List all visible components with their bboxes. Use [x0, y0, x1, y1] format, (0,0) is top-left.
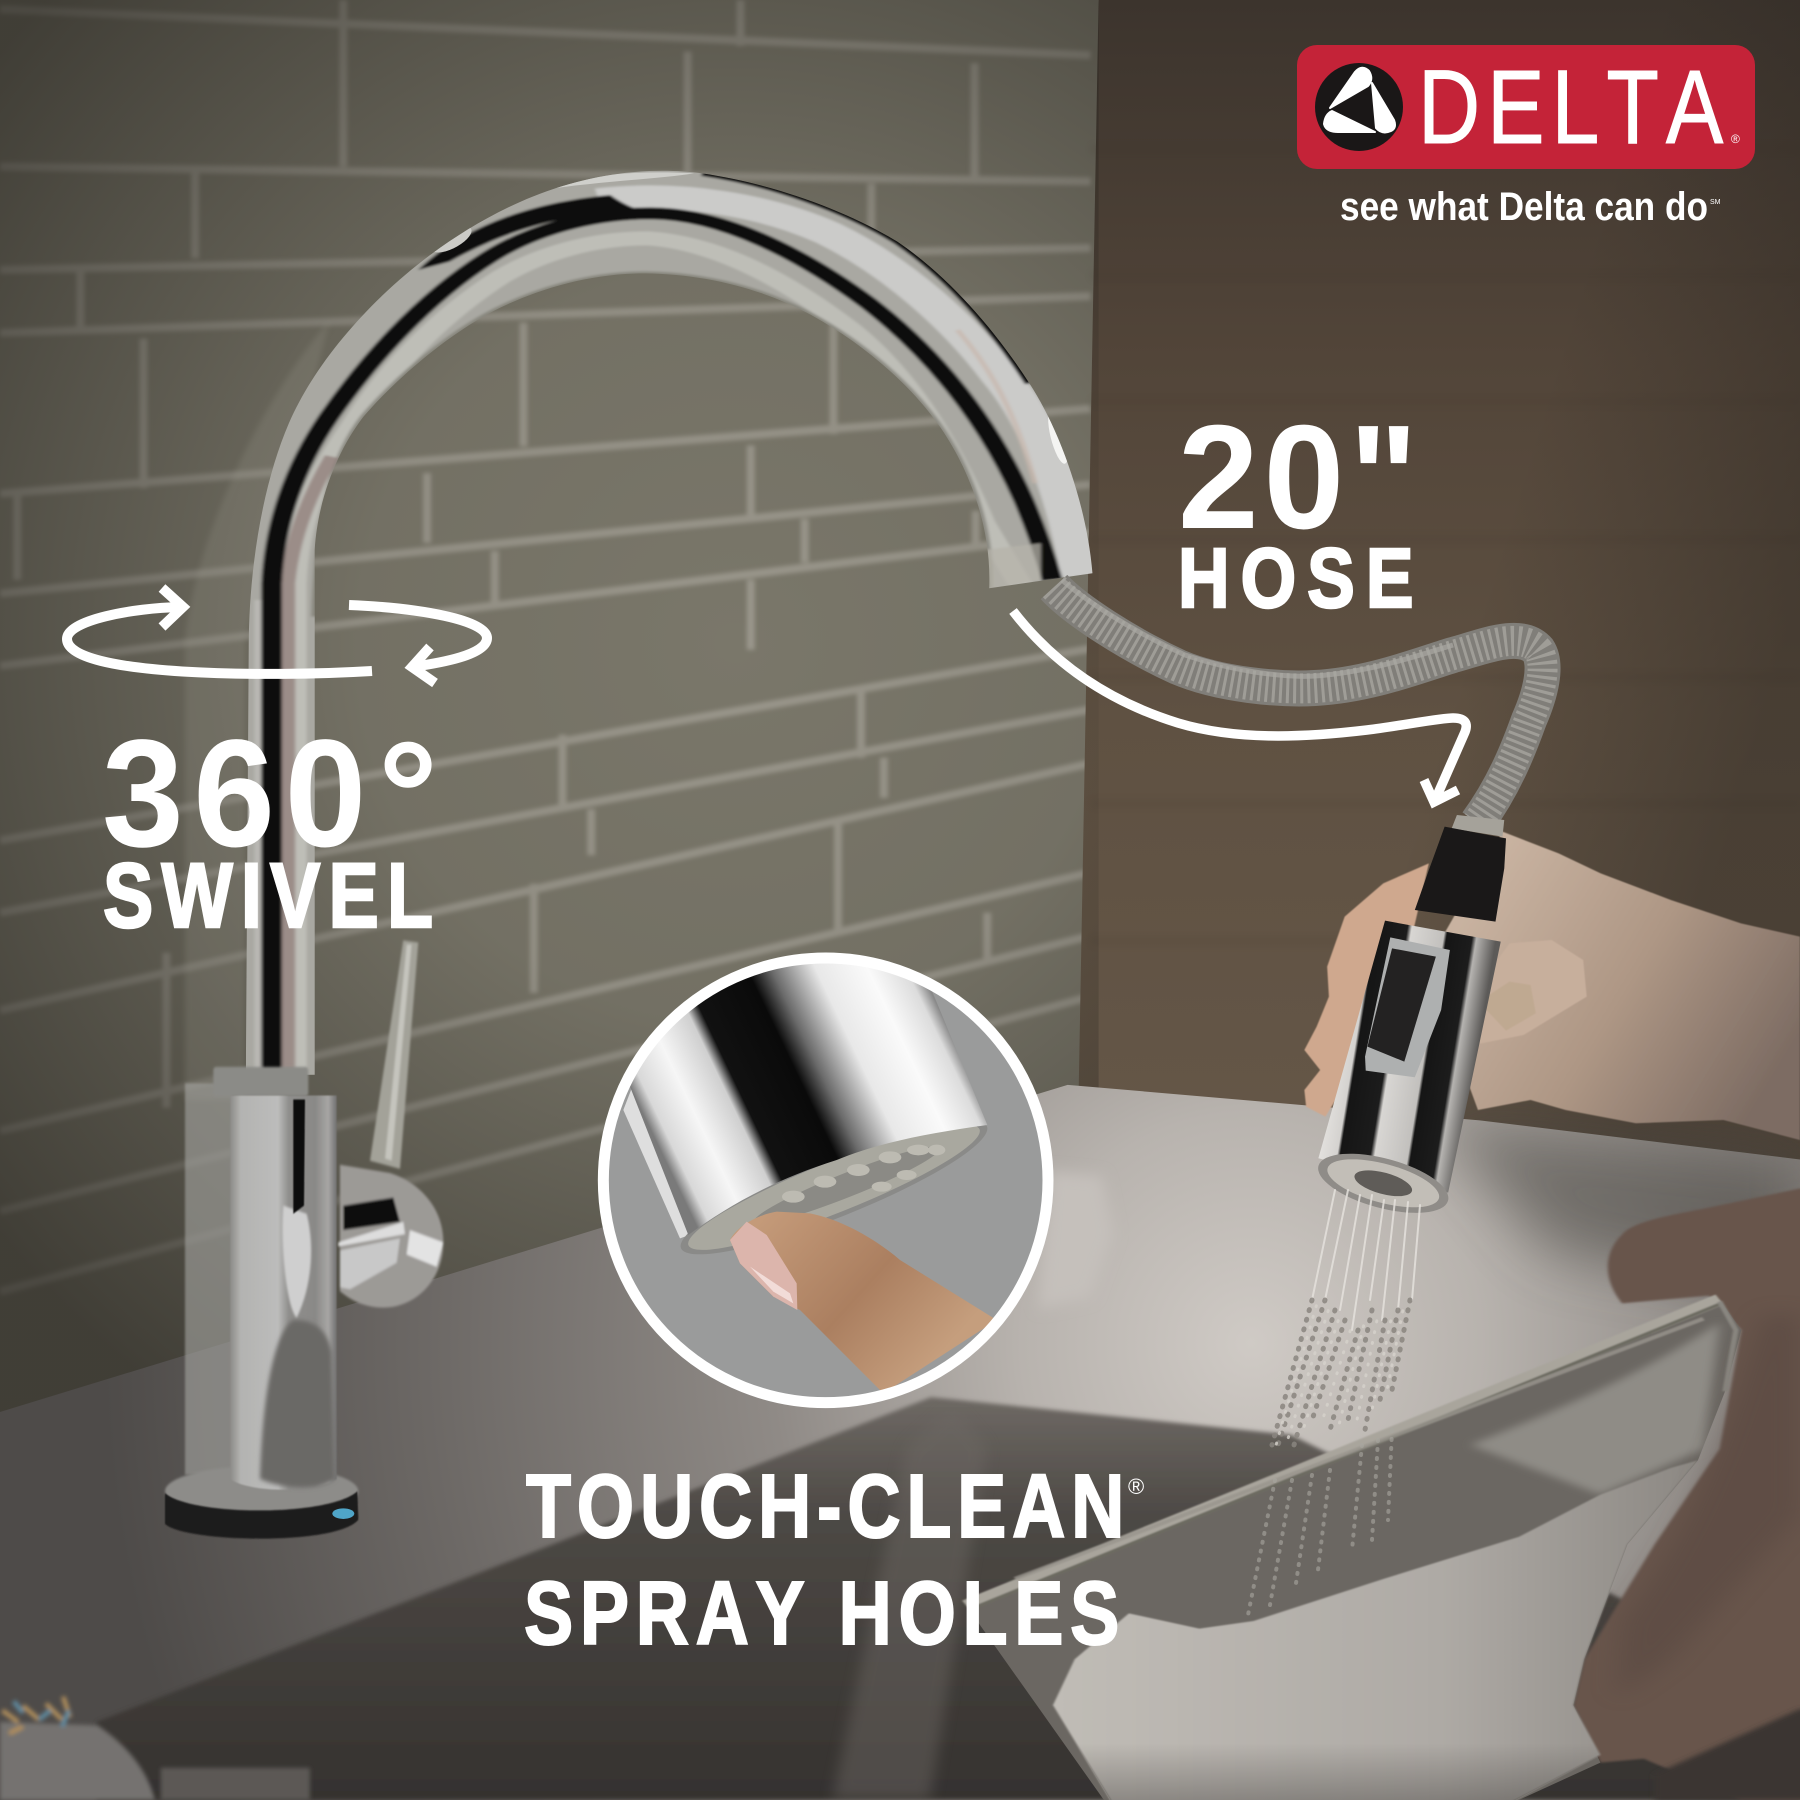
lever handle — [370, 940, 418, 1169]
nozzle face — [680, 1125, 988, 1254]
bowl interior — [966, 1300, 1741, 1800]
faint reflection beside stem — [185, 320, 330, 1100]
hose strip — [623, 1088, 689, 1238]
hose length label: 20" — [1178, 395, 1423, 560]
column black stripe — [293, 1100, 305, 1214]
finger shadow — [1617, 1315, 1800, 1698]
lever highlight — [385, 944, 412, 1161]
water droplets — [1272, 1300, 1410, 1445]
column dark lower reflection — [260, 1320, 335, 1487]
service mark: SM — [1710, 199, 1721, 206]
foamy upper interior — [1470, 1322, 1720, 1495]
registered mark: ® — [1731, 132, 1740, 146]
button surround — [1365, 937, 1450, 1077]
inset medallion: touch-clean spray holes — [603, 933, 1048, 1403]
item on counter — [1039, 1171, 1114, 1309]
counter shade near hand — [1435, 1119, 1800, 1297]
sink corner highlight — [832, 1406, 987, 1800]
nozzle body — [630, 964, 988, 1234]
light droplets — [1276, 1300, 1404, 1445]
hand holding sprayer — [1304, 832, 1800, 1140]
sink basin — [96, 1397, 1800, 1800]
hose word: HOSE — [1178, 530, 1425, 625]
faucet base — [165, 940, 443, 1539]
water spray — [1248, 1190, 1420, 1615]
thumbnail — [1481, 982, 1536, 1031]
sensor ring — [165, 1491, 358, 1539]
360 degree label — [102, 707, 441, 947]
fingernail highlight — [750, 1267, 793, 1303]
medallion ring — [603, 958, 1048, 1403]
registered mark: ® — [1128, 1474, 1144, 1499]
finger — [730, 1212, 997, 1393]
360 degree label: 360 — [102, 707, 376, 879]
swivel rotation arrows — [67, 588, 487, 683]
water streams — [1312, 1190, 1420, 1330]
faucet — [165, 150, 1138, 1539]
base reflection — [185, 1083, 232, 1475]
tile wall — [0, 0, 1114, 1492]
wall shading — [0, 0, 1099, 1492]
mode button — [1367, 948, 1436, 1062]
medallion background — [603, 958, 1048, 1403]
faucet spout and stem — [246, 170, 1092, 1075]
logo red badge — [1297, 45, 1755, 169]
handle knob — [338, 1165, 443, 1308]
wood panel wall — [1077, 0, 1800, 1194]
wood wall shade — [1077, 0, 1800, 1194]
fingers — [1304, 863, 1429, 1117]
logo wordmark: DELTA — [1418, 49, 1730, 166]
batter bottom shade — [1053, 1659, 1600, 1800]
pull-out hose — [1054, 580, 1543, 823]
black collar — [1415, 827, 1506, 922]
thumb — [1460, 940, 1587, 1044]
degree sign: ° — [378, 710, 438, 878]
spray nubs — [782, 1145, 945, 1203]
bottom-right shade — [1655, 1709, 1800, 1800]
droplets through glass — [1248, 1430, 1392, 1615]
treat in corner — [0, 1697, 310, 1800]
countertop — [0, 1085, 1800, 1800]
indicator light — [332, 1508, 354, 1519]
bowl rim — [966, 1300, 1736, 1609]
column bright reflection — [282, 1206, 311, 1318]
fingertip — [730, 1222, 797, 1310]
base ring — [165, 1466, 358, 1516]
touch-clean label: TOUCH-CLEAN — [526, 1457, 1130, 1557]
lower hand — [1573, 1189, 1800, 1800]
base column — [230, 1095, 337, 1490]
swivel label: SWIVEL — [103, 844, 441, 947]
batter in bowl — [1053, 1460, 1698, 1800]
touch-clean label — [524, 1457, 1144, 1664]
collar — [213, 1067, 308, 1096]
mixing bowl and lower hand — [966, 1189, 1800, 1800]
spray face — [1311, 1142, 1455, 1225]
spray holes: SPRAY HOLES — [524, 1564, 1126, 1664]
palm and wrist — [1425, 832, 1800, 1140]
spray head — [1311, 815, 1506, 1225]
logo: Delta — [1297, 45, 1755, 169]
hose arrow — [1013, 611, 1466, 802]
tagline: see what Delta can do — [1340, 185, 1708, 229]
hose ferrule — [1452, 815, 1504, 837]
spray head body — [1318, 921, 1501, 1193]
logo emblem — [1315, 63, 1403, 151]
